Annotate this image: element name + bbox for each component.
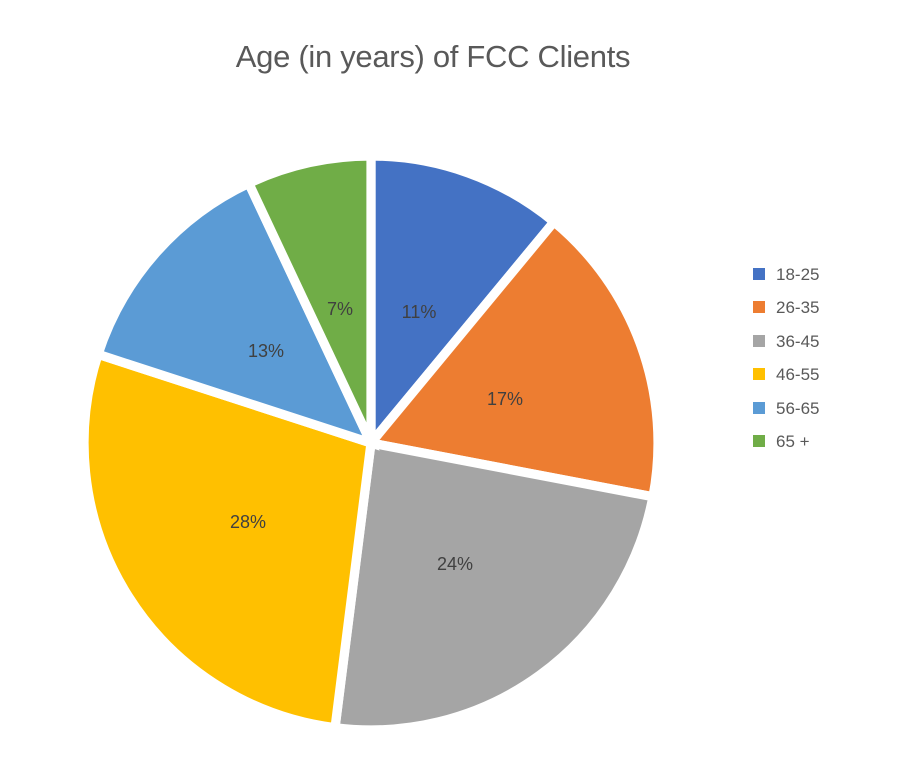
data labels: 11% <box>402 302 436 322</box>
title: Age (in years) of FCC Clients <box>236 39 630 74</box>
legend: 46-55 <box>776 365 819 384</box>
slice: 56-65 <box>98 155 436 443</box>
legend: 65 + <box>776 432 810 451</box>
slice: 26-35 <box>371 222 748 603</box>
pie chart <box>50 131 748 773</box>
slice: 46-55 <box>50 354 378 728</box>
legend: 56-65 <box>776 399 819 418</box>
legend: 26-35 <box>776 298 819 317</box>
data labels: 17% <box>487 389 523 409</box>
data labels: 28% <box>230 512 266 532</box>
legend <box>753 265 819 451</box>
data labels: 13% <box>248 341 284 361</box>
slice: 36-45 <box>317 443 653 773</box>
data labels: 7% <box>327 299 353 319</box>
data labels <box>230 299 523 574</box>
data labels: 24% <box>437 554 473 574</box>
slice: 18-25 <box>371 156 554 443</box>
legend: 18-25 <box>776 265 819 284</box>
slice: 65+ <box>249 131 482 443</box>
legend: 36-45 <box>776 332 819 351</box>
